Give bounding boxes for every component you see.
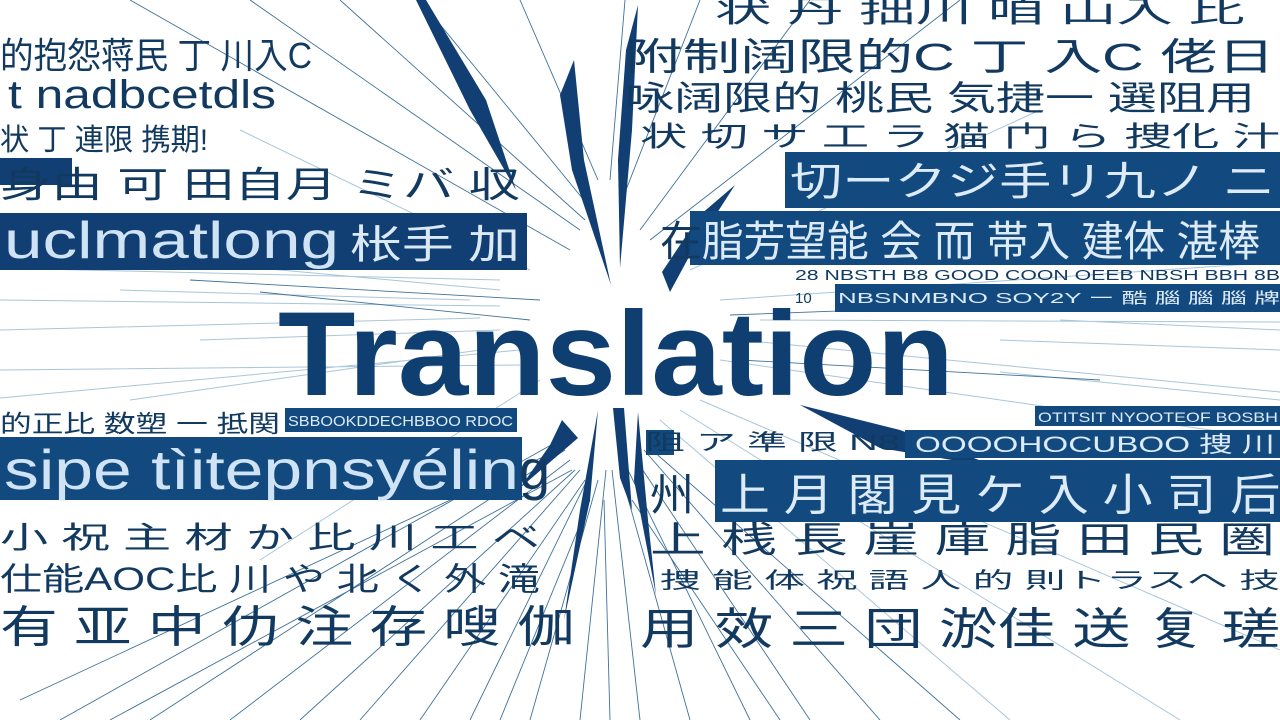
panel: right upper blue banners: 脂芳望能 会 而 帯入 建体 湛棒 (702, 218, 1260, 265)
panel: right upper blue banners: NBSNMBNO SOY2Y ー 酷 腦 腦 腦 牌 (838, 290, 1280, 307)
panel: bottom right text block: 捜 能 体 祝 語 人 的 則トラスへ 技 (660, 568, 1280, 593)
panel: right lower blue banners (645, 406, 1280, 522)
panel: left lower blue banners: g (519, 438, 550, 501)
panel: right upper blue banners: 切ークジ手リ九ノ ニ (790, 160, 1275, 204)
panel: bottom left text block (0, 522, 575, 652)
panel: right lower blue banners: 阻 ア 準 限 N8 (645, 430, 900, 455)
panel: right upper blue banners (660, 152, 1280, 312)
panel: top right text block: 咏阔限的 桃民 気捷一 選阻用 (625, 80, 1255, 118)
panel: bottom right text block: 用 效 三 団 淤佳 送 复 瑳 (640, 605, 1280, 654)
panel: bottom right text block: 上 桟 長 崖 庫 脂 田 民 圏 (650, 519, 1275, 560)
panel: bottom left text block: 有 亚 中 仂 注 存 嗖 伽 (0, 603, 575, 652)
panel: right lower blue banners: 州 (650, 471, 694, 520)
panel: left lower blue banners: SBBOOKDDECHBBOO RDOC (288, 413, 513, 430)
panel: top right text block: 状 切 サ 工 ラ 猫 门 ら 捜化 汁 (640, 121, 1280, 152)
panel: left lower blue banners: 的正比 数塑 一 抵関 (0, 411, 280, 438)
title: Translation (278, 287, 954, 421)
panel: top left text block: 的抱怨蒋民 丁 川入C (0, 35, 312, 76)
panel: top right text block: 附制阔限的C 丁 入C 佬日 (625, 37, 1275, 79)
panel: left upper blue banners (0, 158, 527, 270)
panel: right lower blue banners: OOOOHOCUBOO 捜 川 (915, 432, 1275, 457)
panel: top left text block (0, 35, 312, 157)
panel: bottom left text block: 仕能AOC比 川 や 北 く 外 滝 (0, 561, 540, 597)
panel: left upper blue banners: 枨手 加 (350, 223, 520, 267)
center burst: upper spikes (416, 0, 1000, 620)
panel: right lower blue banners: OTITSIT NYOOTEOF BOSBH (1038, 409, 1278, 425)
panel: top left text block: t nadbcetdls (8, 73, 276, 117)
panel: top right text block (625, 0, 1280, 152)
panel: left upper blue banners: uclmatlong (4, 212, 339, 270)
panel: right upper blue banners: 28 NBSTH B8 GOOD COON OEEB NBSH BBH 8B (795, 267, 1280, 284)
panel: left lower blue banners: sipe tìitepnsyélin (4, 438, 519, 501)
panel: left lower blue banners (0, 408, 550, 501)
panel: bottom left text block: 小 祝 主 材 か 比 川 工 ベ (0, 522, 540, 555)
panel: left upper blue banners: 身由 可 田自月 ミバ 収 (0, 164, 520, 205)
panel: right upper blue banners: 10 (795, 290, 812, 307)
panel: top left text block: 状 丁 連限 携期! (0, 124, 208, 157)
panel: right lower blue banners: 上 月 閣 見 ケ 入 小 司 后 (720, 471, 1280, 520)
panel: right upper blue banners: 在 (660, 218, 702, 265)
panel: bottom right text block (640, 519, 1280, 654)
